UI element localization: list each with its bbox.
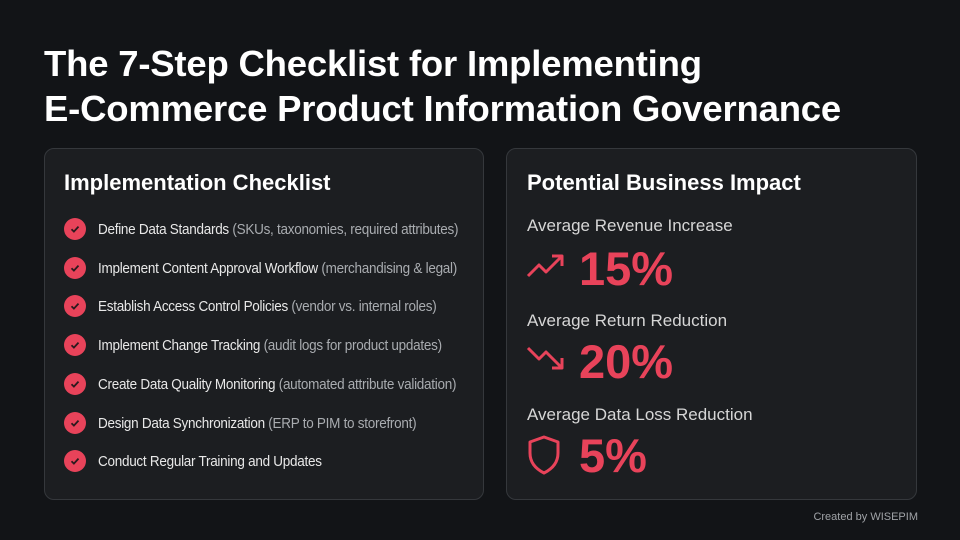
heading: checklist: Implementation Checklist (64, 170, 331, 195)
checklist items (64, 218, 458, 472)
title: The 7-Step Checklist for Implementing (44, 43, 702, 84)
icon: trend up (527, 254, 564, 277)
heading: impact: Potential Business Impact (527, 170, 801, 195)
icon: trend down (527, 347, 564, 370)
text: Implement Change Tracking (audit logs for product updates) (98, 336, 442, 354)
title: E-Commerce Product Information Governance (44, 88, 841, 129)
metric value: 15%: 15% (579, 242, 673, 295)
metric label: revenue: Average Revenue Increase (527, 216, 733, 235)
panel: checklist (44, 148, 484, 500)
title (44, 43, 841, 129)
metric value: 20%: 20% (579, 335, 673, 388)
text: Establish Access Control Policies (vendor vs. internal roles) (98, 298, 436, 314)
icon: shield (528, 436, 560, 474)
text: Define Data Standards (SKUs, taxonomies, required attributes) (98, 220, 458, 238)
metric label: data loss: Average Data Loss Reduction (527, 405, 753, 424)
metric value: 5%: 5% (579, 429, 647, 482)
text: Conduct Regular Training and Updates (98, 452, 322, 470)
footer credit: Created by WISEPIM (813, 511, 918, 523)
text: Design Data Synchronization (ERP to PIM to storefront) (98, 414, 416, 432)
panel: impact (506, 148, 917, 500)
text: Implement Content Approval Workflow (merchandising & legal) (98, 260, 457, 276)
text: Create Data Quality Monitoring (automated attribute validation) (98, 376, 456, 392)
metric label: returns: Average Return Reduction (527, 311, 727, 330)
